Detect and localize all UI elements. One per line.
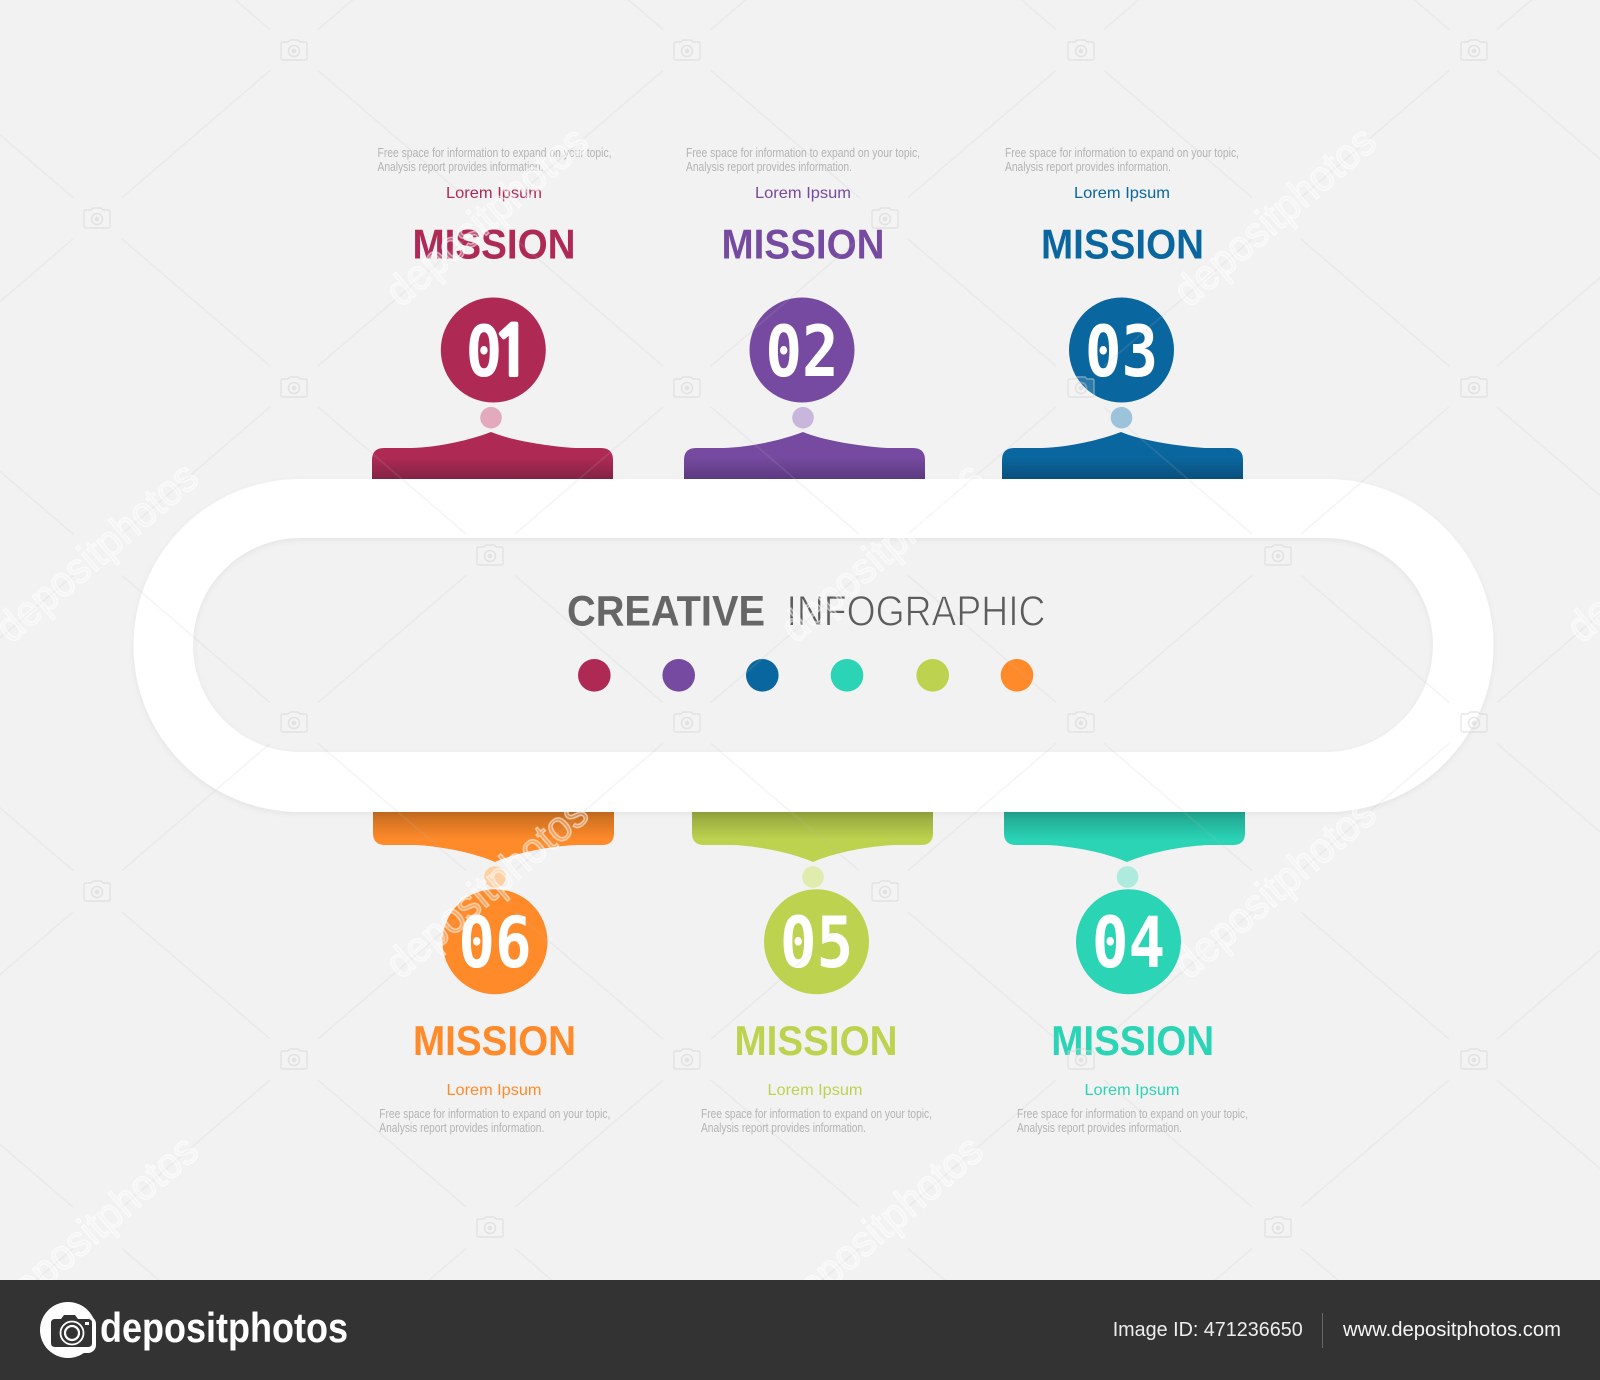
tab 04 [1004, 812, 1245, 862]
step 01 [378, 146, 612, 429]
step 03: Lorem Ipsum [1074, 185, 1170, 202]
step 05: MISSION [734, 1017, 898, 1064]
central title: CREATIVE [567, 588, 765, 636]
step 06: Free space for information to expand on your topic, [379, 1107, 610, 1121]
image id: Image ID: 471236650 [1113, 1319, 1303, 1341]
step 03: Analysis report provides information. [1005, 160, 1171, 174]
step 06: 06 [458, 903, 532, 984]
tab 02 [684, 432, 925, 479]
step 05 [701, 866, 932, 1135]
step 02: 02 [765, 312, 839, 393]
step 06: Lorem Ipsum [446, 1082, 542, 1099]
step 03: MISSION [1041, 220, 1204, 268]
step 06 [379, 866, 610, 1135]
step 04: Analysis report provides information. [1017, 1121, 1182, 1135]
footer bar [0, 1280, 1600, 1380]
step 04 [1017, 866, 1248, 1135]
step 02 [686, 146, 920, 429]
tab 03 [1002, 432, 1243, 479]
white ring frame [134, 479, 1494, 812]
step 01: 1 [491, 318, 533, 387]
step 04: Lorem Ipsum [1084, 1082, 1180, 1099]
watermark text: depositphotos [1164, 789, 1385, 988]
step 01: 0 [466, 312, 502, 393]
step 05: Lorem Ipsum [768, 1082, 862, 1099]
tab 05 [692, 812, 933, 862]
step 04: MISSION [1051, 1017, 1214, 1064]
central title: INFOGRAPHIC [786, 588, 1046, 636]
step 06: MISSION [413, 1017, 576, 1064]
step 03: Free space for information to expand on your topic, [1005, 146, 1239, 160]
central title [567, 588, 1046, 636]
step 01: Lorem Ipsum [446, 185, 542, 202]
tab 06 [373, 812, 614, 862]
watermark text: depositphotos [771, 453, 992, 652]
icon: camera logo [40, 1302, 96, 1358]
watermark text: depositphotos [376, 117, 597, 316]
step 06: Analysis report provides information. [379, 1121, 544, 1135]
step 02: Lorem Ipsum [755, 185, 851, 202]
step 04: Free space for information to expand on your topic, [1017, 1107, 1248, 1121]
step 05: 05 [780, 903, 853, 984]
step 01: Free space for information to expand on your topic, [378, 146, 612, 160]
logo wordmark: depositphotos [100, 1304, 348, 1351]
step 01: MISSION [412, 220, 576, 268]
watermark text: depositphotos [1164, 117, 1385, 316]
colour legend dots [578, 659, 1033, 692]
step 03: 03 [1085, 312, 1158, 393]
step 04: 04 [1092, 903, 1165, 984]
website url: www.depositphotos.com [1342, 1319, 1561, 1341]
watermark text: depositphotos [376, 789, 597, 988]
step 03 [1005, 146, 1239, 429]
step 02: Free space for information to expand on your topic, [686, 146, 920, 160]
step 05: Free space for information to expand on your topic, [701, 1107, 932, 1121]
step 02: MISSION [722, 220, 884, 268]
step 02: Analysis report provides information. [686, 160, 852, 174]
step 01: Analysis report provides information. [378, 160, 544, 174]
watermark text: depositphotos [771, 1126, 992, 1325]
watermark camera icons [84, 40, 1487, 1237]
tab 01 [372, 432, 613, 479]
step 05: Analysis report provides information. [701, 1121, 866, 1135]
